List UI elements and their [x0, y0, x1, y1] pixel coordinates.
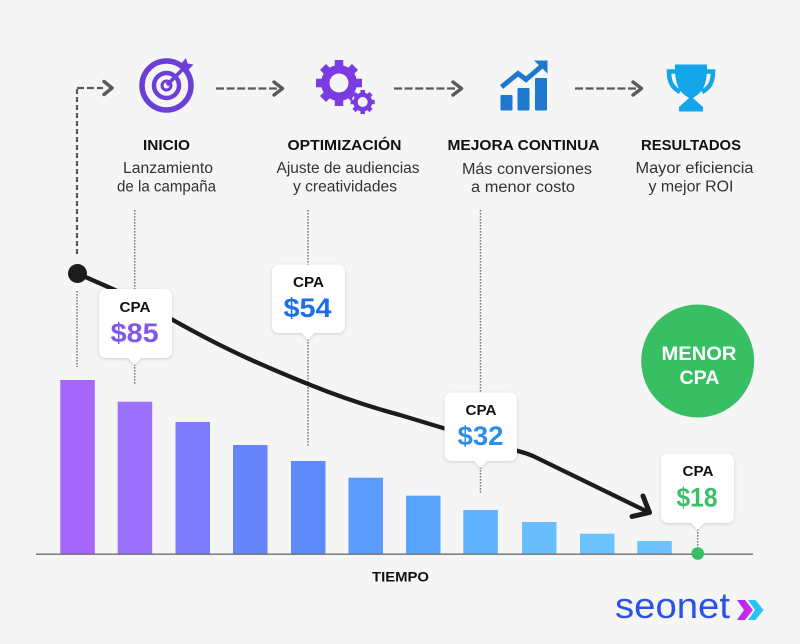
flow arrow: optimizacion to mejora — [394, 82, 462, 95]
callout: CPA 85: CPA — [120, 300, 151, 316]
callout: CPA 54: $54 — [284, 293, 332, 323]
step: optimizacion: Ajuste de audiencias — [276, 160, 420, 177]
step: mejora continua: MEJORA CONTINUA — [448, 137, 600, 154]
callout: CPA 18 — [661, 454, 734, 530]
step: resultados: Mayor eficiencia — [636, 160, 754, 177]
step: mejora continua — [448, 137, 600, 196]
icon: trophy — [669, 64, 713, 112]
step: resultados: y mejor ROI — [648, 178, 734, 196]
step: resultados: RESULTADOS — [641, 137, 741, 154]
flow arrow: mejora to resultados — [575, 82, 642, 95]
step: inicio — [117, 137, 216, 196]
flow arrow: start to inicio — [77, 82, 112, 254]
badge: menor cpa: CPA — [680, 368, 720, 389]
callout: CPA 32 — [444, 392, 517, 468]
icon: target — [142, 58, 194, 110]
callout: CPA 85: $85 — [111, 318, 159, 348]
icon: gears — [316, 60, 375, 114]
step: inicio: Lanzamiento — [123, 160, 213, 177]
step: inicio: INICIO — [143, 137, 190, 154]
step: inicio: de la campaña — [117, 178, 216, 196]
callout: CPA 32: $32 — [458, 421, 504, 451]
bar chart — [60, 380, 672, 554]
callout: CPA 18: $18 — [676, 482, 718, 512]
axis label: TIEMPO — [372, 568, 429, 584]
callout: CPA 54: CPA — [293, 275, 325, 291]
step: optimizacion: y creatividades — [293, 178, 397, 196]
axis line — [36, 553, 753, 555]
step: mejora continua: Más conversiones — [462, 161, 592, 178]
step: resultados — [636, 137, 754, 196]
callout: CPA 32: CPA — [466, 403, 497, 419]
trend curve — [68, 264, 650, 516]
step: mejora continua: a menor costo — [471, 179, 575, 196]
icon: growth chart — [500, 60, 548, 110]
badge: menor cpa: MENOR — [662, 344, 737, 365]
green end point — [691, 547, 704, 560]
step: optimizacion: OPTIMIZACIÓN — [288, 136, 402, 154]
step: optimizacion — [276, 136, 420, 196]
callout: CPA 54 — [272, 264, 345, 340]
callout: CPA 85 — [99, 289, 172, 365]
flow arrow: inicio to optimizacion — [216, 82, 282, 95]
logo: seonet: seonet — [615, 585, 730, 626]
badge: menor cpa — [641, 304, 754, 418]
callout: CPA 18: CPA — [682, 464, 714, 480]
